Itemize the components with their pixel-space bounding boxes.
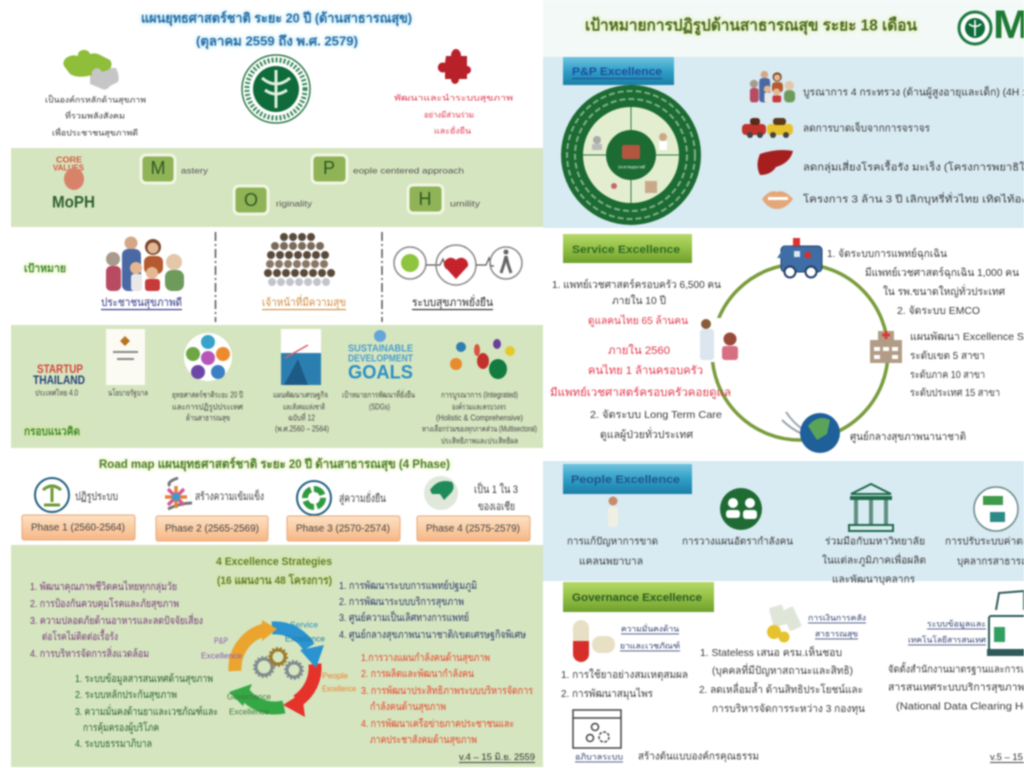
value: H Humility bbox=[408, 185, 480, 213]
text: integrated approach: ประสิทธิภาพและประสิทธิผล bbox=[441, 436, 518, 446]
button: phase 1: Phase 1 (2560-2564) bbox=[31, 522, 125, 534]
button: P&P excellence: P&P Excellence bbox=[572, 66, 662, 78]
value: P People centered approach: eople centered approach bbox=[353, 166, 464, 176]
text: integrated approach: การบูรณาการ (Integrated) bbox=[441, 390, 518, 400]
list: people strategies: 4. การพัฒนาเครือข่ายภาคประชาชนและ bbox=[361, 717, 514, 730]
title: national strategy: (ตุลาคม 2559 ถึง พ.ศ. 2579) bbox=[196, 34, 358, 50]
item: quit smoking bbox=[762, 191, 1024, 209]
heading: 4 excellence strategies bbox=[216, 556, 332, 587]
list: P&P strategies: 1. พัฒนาคุณภาพชีวิตคนไทยทุกกลุ่มวัย bbox=[30, 580, 177, 593]
chart: cycle of four excellences: Governance bbox=[227, 692, 272, 702]
text: excellence centre plan: แผนพัฒนา Excellence S bbox=[910, 331, 1024, 343]
text: compensation reform bbox=[945, 536, 1024, 568]
text: left vision: เพื่อประชาชนสุขภาพดี bbox=[52, 126, 138, 138]
text: national development plan: และสังคมแห่งชาติ bbox=[283, 402, 325, 412]
text: emergency medicine: 2. จัดระบบ EMCO bbox=[897, 305, 980, 317]
label: targets heading: เป้าหมาย bbox=[24, 262, 66, 275]
icon: window with gears bbox=[573, 710, 621, 748]
text: finance actions bbox=[699, 645, 865, 715]
icon: core values fist: VALUES bbox=[53, 164, 85, 172]
label: healthy people: ประชาชนสุขภาพดี bbox=[101, 296, 182, 309]
button: phase 2: Phase 2 (2565-2569) bbox=[165, 524, 259, 534]
panel: service excellence bbox=[550, 234, 1024, 453]
text: family physicians bbox=[550, 278, 731, 441]
text: integrated approach bbox=[422, 390, 537, 446]
value: P People centered approach bbox=[312, 155, 464, 183]
text: family physicians: 1. แพทย์เวชศาสตร์ครอบครัว 6,500 คน bbox=[552, 278, 721, 291]
text: university cooperation: และพัฒนาบุคลากร bbox=[832, 574, 916, 586]
text: excellence centre plan: ระดับประเทศ 15 สาขา bbox=[910, 387, 1000, 399]
list: people strategies: กำลังคนด้านสุขภาพ bbox=[370, 701, 446, 713]
icon: globe and stethoscope bbox=[782, 412, 840, 453]
text: one of three in Asia: เป็น 1 ใน 3 bbox=[474, 482, 518, 496]
text: rational drug use: 2. การพัฒนาสมุนไพร bbox=[561, 687, 653, 700]
text: emergency medicine: ใน รพ.ขนาดใหญ่ทั่วประเทศ bbox=[883, 284, 1005, 298]
icon: ministry seal bbox=[242, 55, 310, 123]
list: P&P strategies bbox=[30, 580, 203, 660]
text: finance actions: (บุคคลที่มีปัญหาสถานะและสิทธิ) bbox=[712, 663, 853, 677]
button: service excellence bbox=[563, 234, 692, 263]
list: people strategies: 3. การพัฒนาประสิทธิภาพระบบบริหารจัดการ bbox=[361, 685, 533, 697]
text: one of three in Asia bbox=[474, 482, 518, 513]
icon: university building bbox=[849, 484, 893, 531]
icon: green puzzle bbox=[63, 50, 119, 90]
text: excellence centre plan bbox=[910, 331, 1024, 399]
chart: health promotion wheel: ประชาชนสุขภาพดี bbox=[618, 164, 645, 170]
text: integrated approach: องค์รวมและครบวงจร bbox=[452, 402, 507, 412]
chart: cycle of four excellences: Excellence bbox=[229, 708, 270, 716]
icon: strength star bbox=[165, 478, 192, 509]
label: data and IT: เทคโนโลยีสารสนเทศ bbox=[908, 634, 986, 644]
heading: 4 excellence strategies: 4 Excellence Strategies bbox=[216, 556, 332, 568]
button: governance excellence bbox=[563, 582, 714, 612]
label: health finance: สาธารณสุข bbox=[815, 630, 858, 638]
button: phase 3: Phase 3 (2570-2574) bbox=[296, 524, 390, 534]
text: 20-year strategy: และการปฏิรูปประเทศ bbox=[172, 402, 243, 412]
icon: coloured organs bbox=[450, 339, 515, 379]
phase 2: สร้างความเข้มแข็ง bbox=[195, 489, 264, 503]
icon: government policy booklet bbox=[106, 329, 148, 398]
icon: core values fist bbox=[53, 156, 85, 190]
logo: sustainable development goals: DEVELOPMENT bbox=[348, 354, 413, 364]
text: nurse shortage bbox=[567, 536, 658, 568]
value: M Mastery bbox=[141, 155, 208, 183]
label: data and IT: ระบบข้อมูลและ bbox=[927, 620, 986, 630]
icon: asia globe bbox=[424, 476, 458, 510]
phase 1: ปฏิรูประบบ bbox=[75, 491, 118, 503]
chart: service ring bbox=[712, 264, 888, 440]
text: left vision bbox=[45, 94, 146, 138]
phase 4 bbox=[417, 476, 530, 541]
label: data and IT bbox=[908, 620, 986, 644]
chart: cycle of four excellences bbox=[201, 620, 356, 717]
list: P&P strategies: 2. การป้องกันควบคุมโรคและภัยสุขภาพ bbox=[30, 597, 179, 610]
version note: v.4 – 15 มิ.ย. 2559 bbox=[459, 752, 535, 762]
label: drug security: ความมั่นคงด้าน bbox=[621, 622, 680, 634]
list: people strategies: 1.การวางแผนกำลังคนด้านสุขภาพ bbox=[361, 652, 490, 664]
label: good governance bbox=[575, 750, 759, 762]
text: university cooperation bbox=[822, 536, 926, 586]
logo: startup thailand: STARTUP bbox=[37, 362, 83, 376]
icon: nurse bbox=[608, 496, 618, 527]
value: O Originality: O bbox=[244, 190, 258, 210]
phase 3 bbox=[287, 481, 400, 541]
text: right vision bbox=[394, 94, 513, 136]
panel: governance excellence bbox=[561, 582, 1024, 762]
text: university cooperation: ในแต่ละภูมิภาคเพื่อผลิต bbox=[822, 552, 926, 566]
list: people strategies: 2. การผลิตและพัฒนากำลังคน bbox=[361, 668, 474, 680]
title: 18 month reform targets: เป้าหมายการปฏิรูปด้านสาธารณสุข ระยะ 18 เดือน bbox=[585, 16, 917, 36]
text: emergency medicine: มีแพทย์เวชศาสตร์ฉุกเฉิน 1,000 คน bbox=[865, 266, 1019, 279]
logo: startup thailand bbox=[33, 362, 85, 398]
chart: cycle of four excellences: P&P bbox=[214, 636, 228, 646]
text: finance actions: 2. ลดเหลื่อมล้ำ ด้านสิทธิประโยชน์และ bbox=[699, 682, 863, 696]
icon: crowd of staff bbox=[268, 237, 334, 282]
list: P&P strategies: 4. การบริหารจัดการสิ่งแวดล้อม bbox=[30, 646, 149, 660]
value: P People centered approach: P bbox=[323, 158, 335, 178]
list: governance strategies: 3. ความมั่นคงด้านยาและเวชภัณฑ์และ bbox=[75, 704, 218, 718]
phase 3: สู่ความยั่งยืน bbox=[339, 490, 386, 505]
button: governance excellence: Governance Excellence bbox=[572, 592, 702, 604]
text: national development plan bbox=[273, 390, 329, 434]
icon: core values fist: CORE bbox=[56, 156, 83, 164]
list: governance strategies bbox=[75, 673, 218, 750]
icon: compensation bbox=[974, 487, 1018, 531]
chart: cycle of four excellences: Service bbox=[290, 620, 319, 630]
text: 20-year strategy: ยุทธศาสตร์ชาติระยะ 20 ปี bbox=[172, 390, 243, 400]
label: drug security: ยาและเวชภัณฑ์ bbox=[620, 640, 680, 650]
title: national strategy: แผนยุทธศาสตร์ชาติ ระยะ 20 ปี (ด้านสาธารณสุข) bbox=[141, 10, 412, 26]
value: M Mastery: astery bbox=[181, 166, 208, 176]
item: four ministries integration bbox=[750, 71, 1024, 102]
label: framework heading: กรอบแนวคิด bbox=[24, 425, 80, 438]
label: drug security bbox=[620, 622, 680, 650]
label: MoPH: MoPH bbox=[52, 192, 95, 212]
panel: P&P excellence bbox=[543, 57, 1024, 228]
icon: hospital bbox=[870, 331, 902, 363]
icon: reform palm bbox=[35, 478, 69, 512]
item: traffic injuries bbox=[742, 118, 931, 138]
button: phase 4: Phase 4 (2575-2579) bbox=[426, 524, 520, 534]
logo: sustainable development goals: SUSTAINABLE bbox=[348, 344, 413, 354]
title: national strategy bbox=[141, 10, 412, 50]
label: good governance: สร้างต้นแบบองค์กรคุณธรรม bbox=[638, 750, 759, 762]
list: service strategies: 3. ศูนย์ความเป็นเลิศทางการแพทย์ bbox=[339, 610, 469, 624]
text: right vision: อย่างมีส่วนร่วม bbox=[424, 110, 474, 120]
panel: MoPH core values band bbox=[11, 148, 543, 227]
text: nurse shortage: แคลนพยาบาล bbox=[579, 556, 643, 568]
text: national development plan: ฉบับที่ 12 bbox=[288, 412, 315, 422]
label: good governance: อภิบาลระบบ bbox=[575, 752, 623, 762]
button: service excellence: Service Excellence bbox=[572, 244, 680, 256]
text: 20-year strategy bbox=[172, 390, 243, 422]
heading: road map: Road map แผนยุทธศาสตร์ชาติ ระยะ 20 ปี ด้านสาธารณสุข (4 Phase) bbox=[99, 457, 450, 472]
list: service strategies bbox=[339, 579, 526, 641]
panel: 4 excellence strategies bbox=[11, 545, 543, 767]
icon: doctor and child bbox=[697, 318, 743, 362]
text: integrated approach: ทางเลือกร่วมของทุกภาคส่วน (Multisectoral) bbox=[422, 424, 537, 434]
value: H Humility: H bbox=[418, 189, 432, 209]
label: health finance: การเงินการคลัง bbox=[808, 614, 866, 622]
panel: conceptual framework band bbox=[11, 325, 543, 448]
text: left vision: เป็นองค์กรหลักด้านสุขภาพ bbox=[45, 94, 146, 104]
text: right vision: พัฒนาและนำระบบสุขภาพ bbox=[394, 94, 513, 102]
text: integrated approach: (Holistic & Comprehensive) bbox=[436, 414, 523, 422]
icon: national development plan cover bbox=[281, 329, 321, 385]
text: family physicians: ดูแลผู้ป่วยทั่วประเทศ bbox=[600, 427, 693, 441]
item: four ministries integration: บูรณาการ 4 กระทรวง (ด้านผู้สูงอายุและเด็ก) (4H : bbox=[803, 84, 1024, 98]
chart: cycle of four excellences: Excellence bbox=[285, 634, 326, 644]
list: governance strategies: 1. ระบบข้อมูลสารสนเทศด้านสุขภาพ bbox=[75, 673, 213, 685]
logo: startup thailand: THAILAND bbox=[33, 373, 85, 387]
list: people strategies: ภาคประชาสังคมด้านสุขภาพ bbox=[370, 734, 477, 746]
icon: ambulance bbox=[777, 238, 822, 278]
item: traffic injuries: ลดการบาดเจ็บจากการจราจร bbox=[803, 120, 931, 134]
text: international health hub: ศูนย์กลางสุขภาพนานาชาติ bbox=[850, 430, 966, 443]
list: service strategies: 2. การพัฒนาระบบบริการสุขภาพ bbox=[339, 596, 464, 608]
logo: sustainable development goals bbox=[342, 330, 415, 412]
label: health finance bbox=[808, 614, 866, 638]
logo: sustainable development goals: เป้าหมายการพัฒนาที่ยั่งยืน bbox=[342, 388, 415, 400]
text: finance actions: การบริหารจัดการระหว่าง 3 กองทุน bbox=[712, 703, 865, 715]
list: P&P strategies: 3. ความปลอดภัยด้านอาหารและลดปัจจัยเสี่ยง bbox=[30, 613, 203, 627]
text: family physicians: มีแพทย์เวชศาสตร์ครอบครัวคอยดูแล bbox=[550, 386, 731, 399]
icon: health system pulse bbox=[394, 245, 522, 285]
text: national development plan: แผนพัฒนาเศรษฐกิจ bbox=[273, 390, 328, 400]
text: family physicians: คนไทย 1 ล้านครอบครัว bbox=[588, 364, 703, 377]
text: right vision: และยั่งยืน bbox=[434, 124, 472, 136]
text: national development plan: (พ.ศ.2560 – 2564) bbox=[275, 424, 329, 434]
list: governance strategies: การคุ้มครองผู้บริโภค bbox=[83, 721, 159, 734]
button: P&P excellence bbox=[563, 57, 674, 85]
icon: capsule bbox=[573, 620, 615, 662]
chart: cycle of four excellences: People bbox=[322, 672, 349, 680]
text: university cooperation: ร่วมมือกับมหาวิทยาลัย bbox=[825, 536, 925, 548]
value: H Humility: umility bbox=[450, 200, 480, 208]
button: people excellence bbox=[563, 464, 692, 494]
list: people strategies bbox=[361, 652, 533, 746]
text: finance actions: 1. Stateless เสนอ ครม.เห็นชอบ bbox=[700, 645, 842, 659]
icon: red puzzle bbox=[438, 49, 471, 84]
list: service strategies: 1. การพัฒนาระบบการแพทย์ปฐมภูมิ bbox=[339, 579, 477, 592]
panel: people excellence bbox=[543, 461, 1024, 586]
text: 20-year strategy: ด้านสาธารณสุข bbox=[186, 414, 230, 422]
text: excellence centre plan: ระดับเขต 5 สาขา bbox=[910, 350, 985, 362]
text: emergency medicine bbox=[827, 247, 1019, 317]
icon: government policy booklet: นโยบายรัฐบาล bbox=[108, 388, 148, 398]
text: family physicians: ภายใน 2560 bbox=[608, 344, 670, 357]
text: left vision: ที่รวมพลังสังคม bbox=[65, 110, 125, 120]
list: P&P strategies: ต่อโรคไม่ติดต่อเรื้อรัง bbox=[42, 629, 118, 643]
phase 1 bbox=[22, 478, 135, 540]
icon: coins and notes bbox=[767, 605, 802, 642]
text: nurse shortage: การแก้ปัญหาการขาด bbox=[567, 536, 658, 548]
heading: 4 excellence strategies: (16 แผนงาน 48 โครงการ) bbox=[217, 573, 332, 587]
list: governance strategies: 2. ระบบหลักประกันสุขภาพ bbox=[75, 689, 177, 701]
text: rational drug use: 1. การใช้ยาอย่างสมเหตุสมผล bbox=[561, 668, 688, 681]
value: O Originality bbox=[234, 186, 312, 214]
icon: laptop with document bbox=[988, 591, 1024, 655]
logo: startup thailand: ประเทศไทย 4.0 bbox=[35, 388, 78, 398]
item: quit smoking: โครงการ 3 ล้าน 3 ปี เลิกบุหรี่ทั่วไทย เทิดไท้องค์ราชัน bbox=[803, 192, 1024, 206]
text: family physicians: ดูแลคนไทย 65 ล้านคน bbox=[588, 314, 688, 327]
chart: cycle of four excellences: Excellence bbox=[201, 652, 243, 660]
item: liver cancer risk bbox=[758, 150, 1024, 175]
button: people excellence: People Excellence bbox=[571, 474, 680, 486]
value: O Originality: riginality bbox=[276, 200, 312, 208]
icon: family bbox=[106, 236, 184, 291]
value: M Mastery: M bbox=[150, 158, 166, 178]
text: one of three in Asia: ของเอเชีย bbox=[478, 500, 515, 513]
text: emergency medicine: 1. จัดระบบการแพทย์ฉุกเฉิน bbox=[827, 247, 947, 260]
icon: recycle bbox=[297, 481, 331, 515]
chart: cycle of four excellences: Excellence bbox=[322, 684, 356, 694]
logo: ministry seal and M bbox=[959, 3, 1024, 47]
logo: sustainable development goals: GOALS bbox=[348, 362, 413, 384]
chart: health promotion wheel bbox=[561, 85, 701, 225]
phase 2 bbox=[156, 478, 268, 541]
text: family physicians: ภายใน 10 ปี bbox=[612, 294, 666, 307]
list: service strategies: 4. ศูนย์กลางสุขภาพนานาชาติ/เขตเศรษฐกิจพิเศษ bbox=[339, 628, 526, 641]
icon: workforce group bbox=[720, 488, 762, 530]
text: family physicians: 2. จัดระบบ Long Term Care bbox=[590, 409, 722, 421]
page background: right pale header bbox=[543, 0, 1024, 57]
icon: five pentagons bbox=[184, 333, 232, 381]
logo: sustainable development goals: (SDGs) bbox=[369, 402, 390, 412]
text: national data clearing house bbox=[888, 662, 1024, 712]
list: governance strategies: 4. ระบบธรรมาภิบาล bbox=[75, 738, 152, 750]
text: workforce planning: การวางแผนอัตรากำลังคน bbox=[682, 536, 793, 548]
label: happy staff: เจ้าหน้าที่มีความสุข bbox=[262, 294, 346, 309]
text: excellence centre plan: ระดับภาค 10 สาขา bbox=[910, 369, 985, 381]
text: rational drug use bbox=[561, 668, 688, 700]
label: sustainable health system: ระบบสุขภาพยั่งยืน bbox=[412, 294, 493, 309]
